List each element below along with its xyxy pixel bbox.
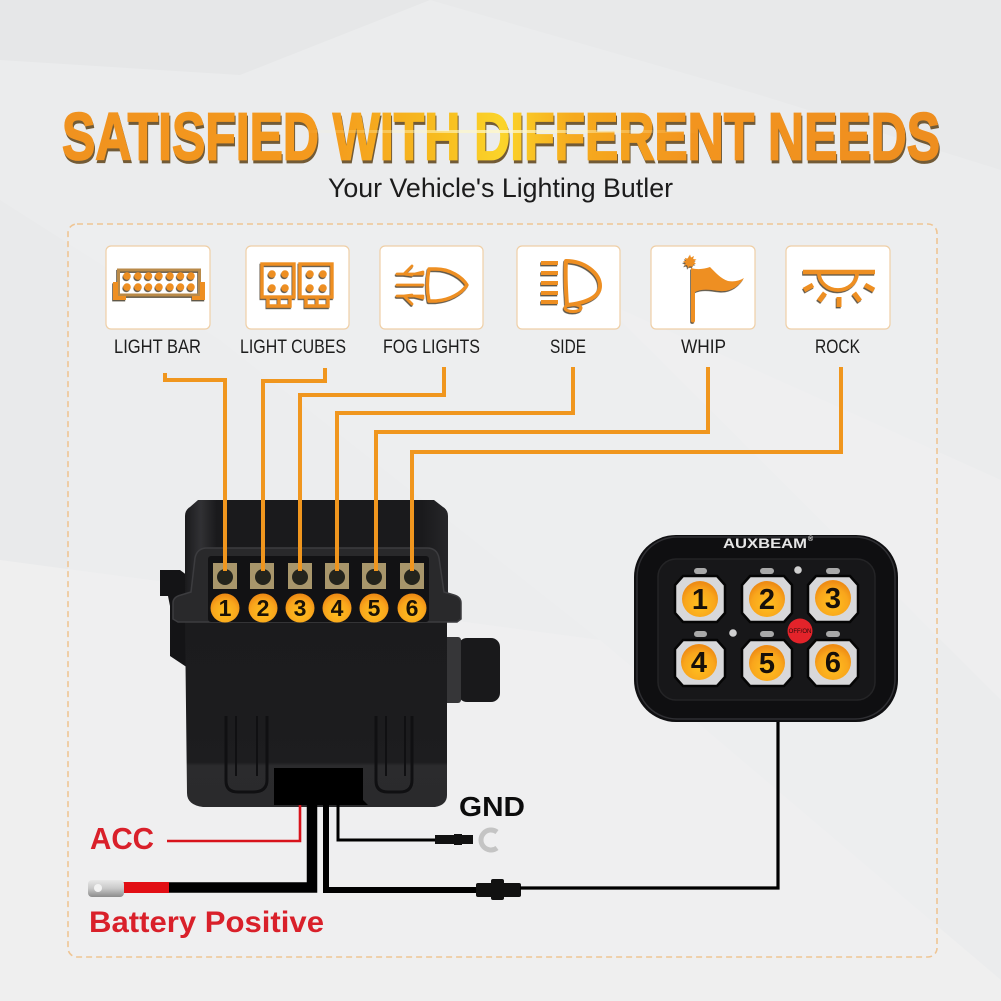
switch panel wire <box>326 718 778 900</box>
icon labels: WHIP <box>681 337 726 358</box>
icon: rock light <box>803 272 875 307</box>
switch numbers: 2 <box>759 584 775 616</box>
off/on button: OFF/ON <box>789 629 811 635</box>
icon: fog light <box>397 266 467 304</box>
switch numbers: 1 <box>692 584 708 616</box>
housing cap <box>185 500 448 606</box>
switch panel <box>634 535 898 722</box>
icon: light bar <box>113 270 205 300</box>
battery positive wire <box>88 805 312 897</box>
numbered terminal badges: 4 <box>331 595 344 621</box>
numbered terminal badges: 5 <box>368 595 381 621</box>
numbered terminal badges: 1 <box>219 595 232 621</box>
icon labels: FOG LIGHTS <box>383 337 480 358</box>
switch numbers: 5 <box>759 648 775 680</box>
card: fog lights <box>380 246 483 329</box>
GND label: GND <box>459 791 525 822</box>
GND wire <box>338 805 497 850</box>
switch numbers <box>681 580 851 681</box>
subtitle: Your Vehicle's Lighting Butler <box>328 173 673 203</box>
numbered terminal badges: 3 <box>294 595 306 621</box>
brand: AUXBEAM <box>723 536 807 551</box>
numbered terminal badges: 6 <box>406 595 418 621</box>
housing body <box>185 620 447 807</box>
switch buttons <box>675 576 858 686</box>
card: side <box>517 246 620 329</box>
terminal recess <box>208 556 429 622</box>
numbered terminal badges: 2 <box>257 595 269 621</box>
card: light cubes <box>246 246 349 329</box>
ACC wire <box>167 805 300 841</box>
icon labels: ROCK <box>815 337 860 358</box>
off/on button <box>788 618 812 644</box>
card: rock <box>786 246 890 329</box>
cable tape <box>274 768 368 805</box>
icon labels: LIGHT CUBES <box>240 337 346 358</box>
switch numbers: 6 <box>825 647 841 679</box>
icon labels: LIGHT BAR <box>114 337 201 358</box>
card: light bar <box>106 246 210 329</box>
icon: light cubes <box>262 264 332 306</box>
switch numbers: 4 <box>691 647 707 679</box>
terminal arch and flange <box>173 548 461 622</box>
switch numbers: 3 <box>825 583 841 615</box>
brand: ® <box>808 535 814 543</box>
right connector <box>433 637 500 703</box>
control module <box>160 500 500 807</box>
body clips <box>226 716 412 792</box>
icon: whip flag <box>683 254 744 322</box>
numbered terminal badges <box>210 594 426 622</box>
battery positive label: Battery Positive <box>89 906 324 939</box>
icon: side light <box>541 261 600 312</box>
dashed content panel <box>68 224 937 957</box>
icon labels <box>114 337 860 358</box>
brass terminals <box>213 563 424 589</box>
left clip <box>160 570 188 668</box>
wiring <box>88 718 778 900</box>
icon labels: SIDE <box>550 337 586 358</box>
LED indicators <box>694 566 840 637</box>
ACC label: ACC <box>90 821 154 856</box>
card: whip <box>651 246 755 329</box>
orange connection lines <box>165 367 841 571</box>
